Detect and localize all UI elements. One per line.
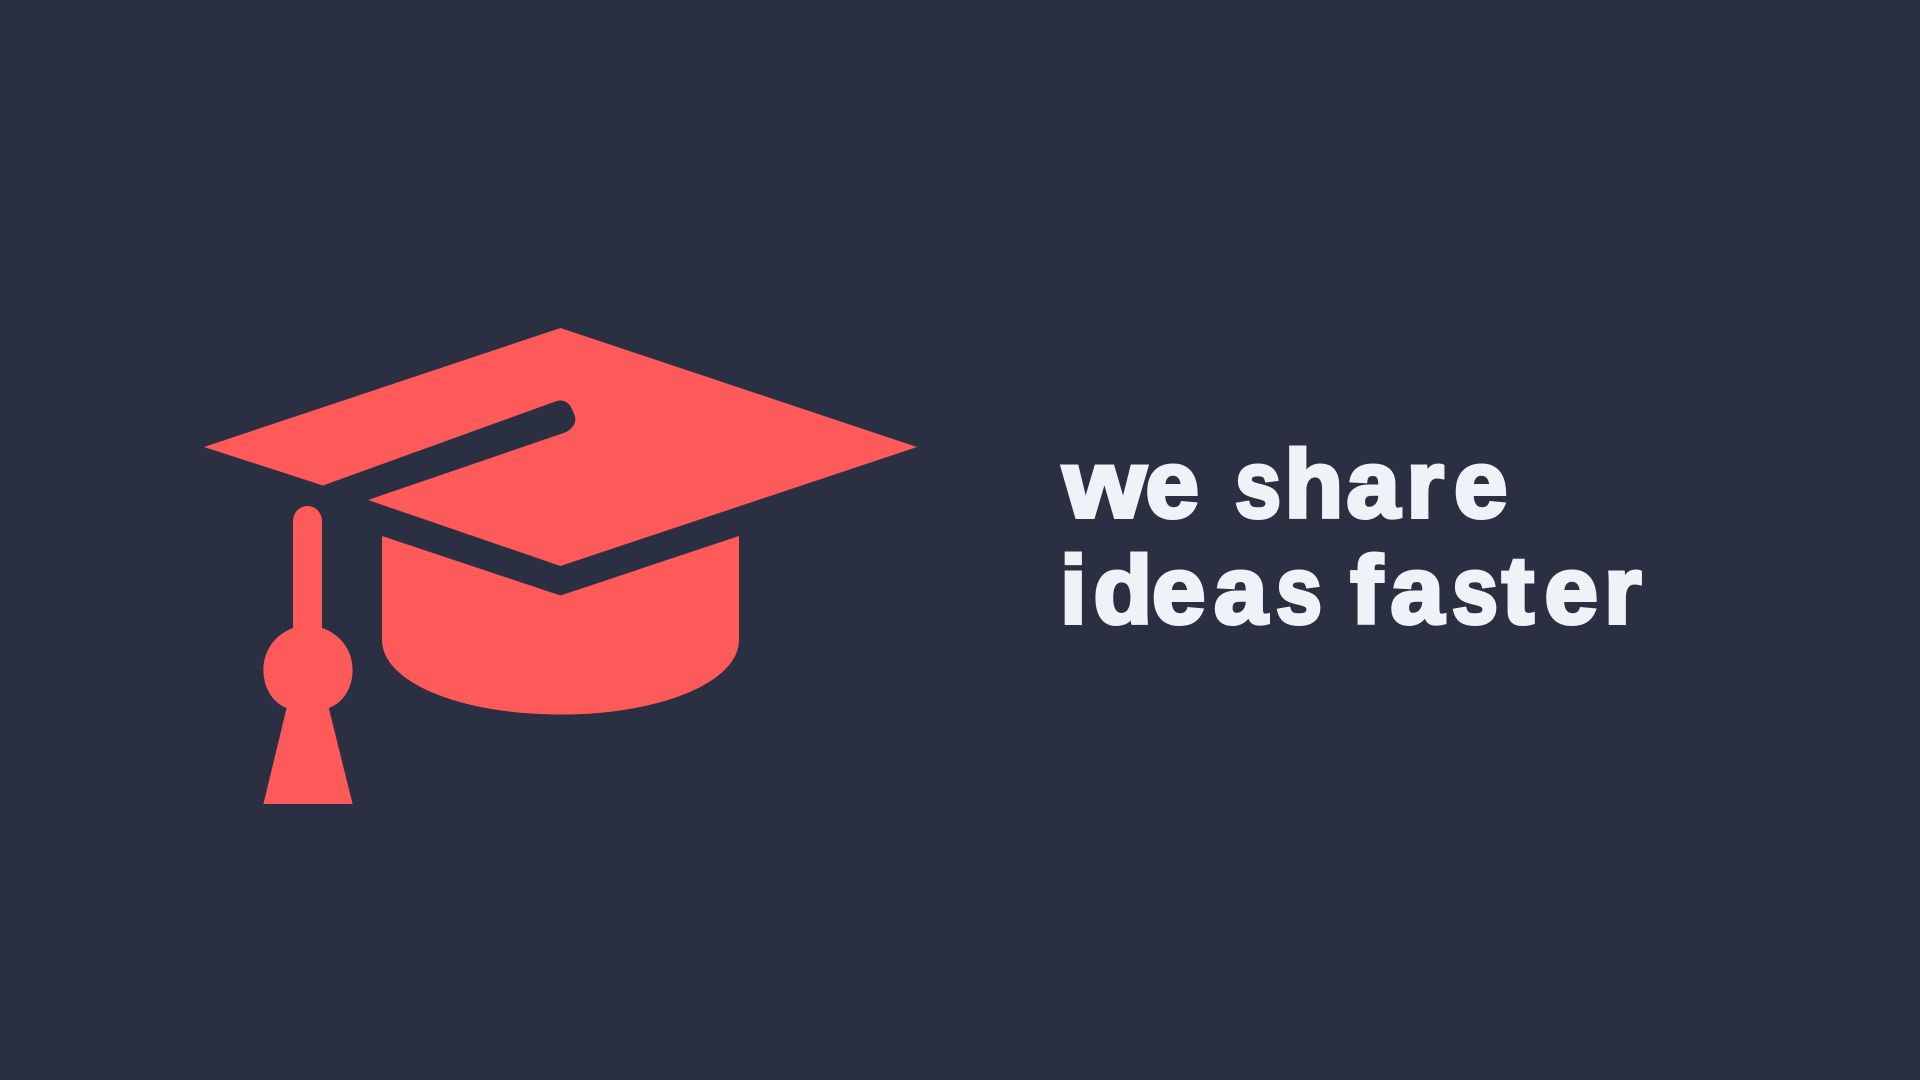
cap board bbox=[204, 328, 917, 566]
tassel bbox=[263, 506, 353, 804]
headline line 2: s bbox=[1452, 537, 1498, 644]
headline text bbox=[1060, 431, 1641, 644]
headline line 2: s bbox=[1276, 537, 1322, 644]
headline line 1: s bbox=[1235, 431, 1281, 538]
headline line 1: w bbox=[1062, 431, 1146, 538]
headline line 2: idea bbox=[1060, 537, 1268, 644]
headline line 1: e bbox=[1146, 431, 1252, 538]
headline line 2: ter bbox=[1502, 537, 1641, 644]
headline line 2: fa bbox=[1340, 537, 1444, 644]
headline line 1: hare bbox=[1284, 431, 1507, 538]
cap base bbox=[382, 536, 739, 714]
icon: graduation cap bbox=[204, 328, 917, 804]
